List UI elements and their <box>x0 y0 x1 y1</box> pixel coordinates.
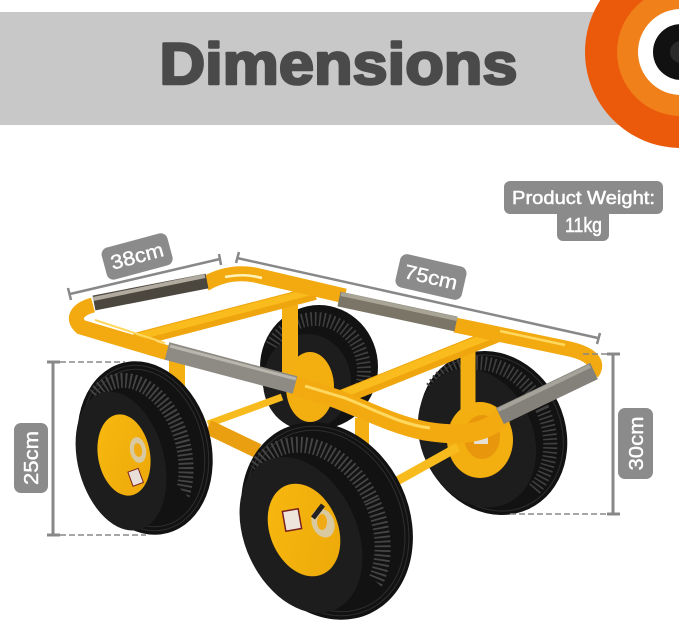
label: 75cm: 75cm <box>402 261 460 295</box>
label: 38cm: 38cm <box>108 239 166 275</box>
label: 25cm: 25cm <box>21 431 43 485</box>
product weight badge <box>504 181 663 241</box>
back right wheel <box>418 351 568 515</box>
foam grips <box>93 276 594 416</box>
label: 30cm <box>618 408 653 479</box>
label: 30cm: 30cm <box>626 416 648 471</box>
width dimension line <box>68 254 221 300</box>
length dimension line <box>236 252 600 344</box>
grip: front left <box>167 346 296 385</box>
front centre wheel <box>240 422 413 620</box>
label: 38cm <box>100 232 174 281</box>
corner wheel graphic <box>585 0 679 148</box>
title banner <box>0 0 679 148</box>
grip: back right <box>339 294 457 324</box>
yellow perimeter frame <box>76 274 595 434</box>
product weight badge: Product Weight: <box>512 188 655 208</box>
label: 25cm <box>14 423 48 493</box>
title: Dimensions <box>160 32 518 97</box>
product weight badge: 11kg <box>565 215 602 237</box>
front left wheel <box>76 361 213 535</box>
label: 75cm <box>394 253 468 301</box>
grip: front right <box>498 366 594 416</box>
frame cross tubes <box>135 291 497 400</box>
total height dimension <box>510 354 620 514</box>
back centre wheel <box>260 305 378 430</box>
lower frame bars and posts <box>177 305 468 481</box>
grip: back left <box>93 276 207 303</box>
wheel height dimension <box>47 362 146 535</box>
trolley <box>58 274 595 622</box>
